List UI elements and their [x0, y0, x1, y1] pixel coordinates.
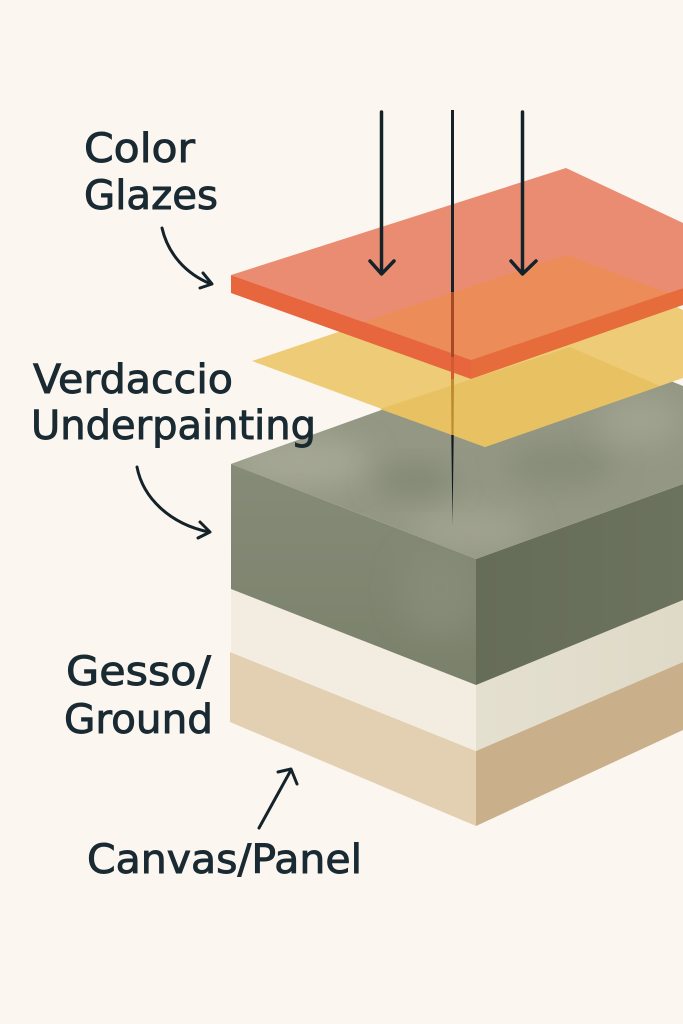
center line upper section — [451, 110, 454, 379]
label: gesso ground — [64, 649, 213, 743]
arrow: right down — [511, 112, 536, 274]
label: verdaccio underpainting: Underpainting — [31, 403, 316, 449]
center line lower section — [451, 379, 454, 525]
label: color glazes: Color — [84, 126, 196, 172]
layer: yellow glaze — [252, 255, 683, 447]
arrow: color glazes pointer — [162, 228, 212, 288]
arrow: verdaccio pointer — [137, 467, 210, 538]
label: canvas/panel: Canvas/Panel — [87, 837, 362, 883]
label: gesso ground: Ground — [64, 697, 213, 743]
label: color glazes: Glazes — [84, 173, 218, 219]
layer: canvas/panel — [230, 652, 683, 826]
label: verdaccio underpainting — [31, 357, 316, 449]
arrow: canvas pointer — [259, 769, 297, 828]
arrow: left down — [370, 112, 394, 274]
layer: color glazes — [231, 168, 683, 379]
label: gesso ground: Gesso/ — [66, 649, 212, 695]
label: verdaccio underpainting: Verdaccio — [33, 357, 233, 403]
layer: gesso ground — [231, 588, 683, 751]
label: color glazes — [84, 126, 218, 219]
layer: verdaccio underpainting — [231, 382, 683, 685]
